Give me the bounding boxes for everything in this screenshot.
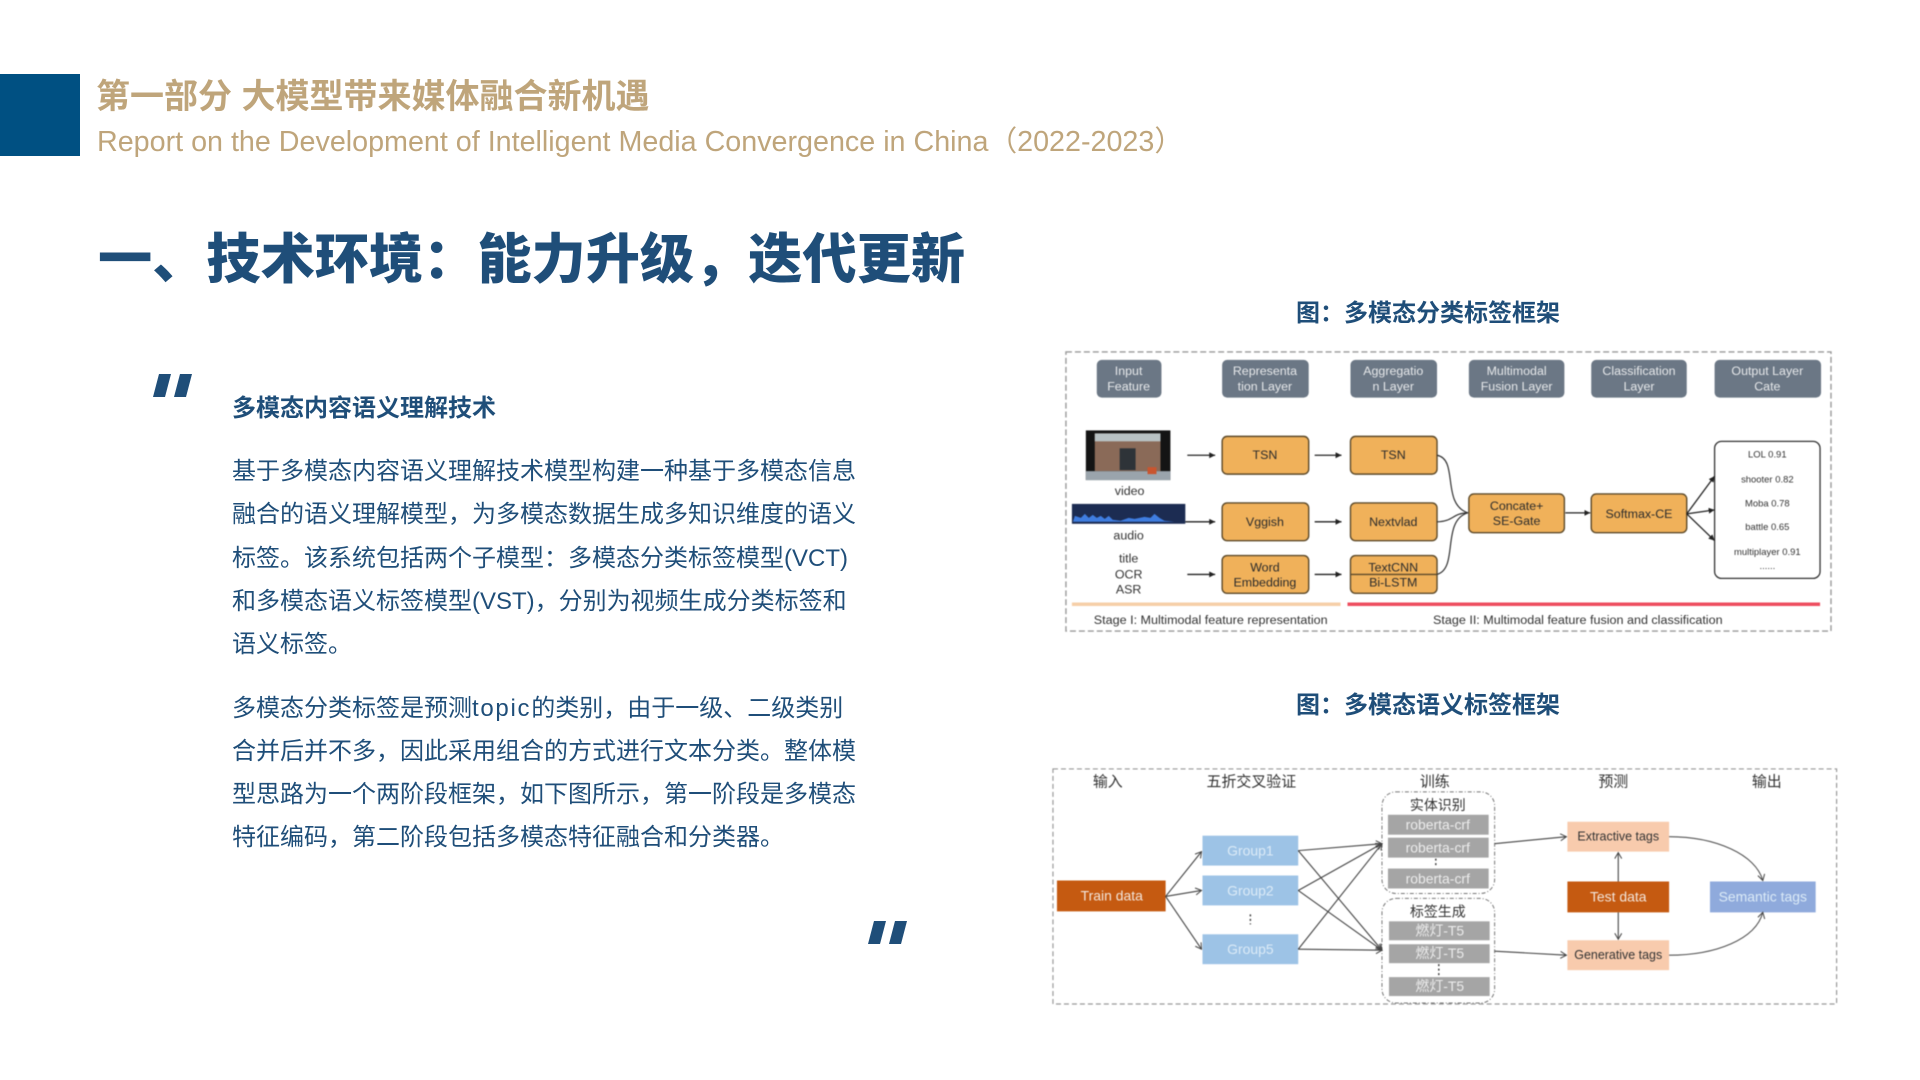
paragraph 1: 和多模态语义标签模型(VST)，分别为视频生成分类标签和: [232, 588, 847, 615]
paragraph 2: [232, 694, 856, 851]
text: TextCNN Bi-LSTM: TextCNN: [1368, 560, 1418, 574]
header: classification layer: Layer: [1623, 379, 1654, 393]
header: multimodal fusion layer: Multimodal: [1486, 363, 1546, 377]
paragraph 1: 融合的语义理解模型，为多模态数据生成多知识维度的语义: [232, 501, 856, 528]
output list: LOL 0.91: [1748, 449, 1786, 460]
header accent block: [0, 74, 80, 156]
connectors: aggregation to fusion: [1437, 455, 1468, 574]
paragraph 1: [232, 458, 856, 658]
header: aggregation layer: n Layer: [1372, 379, 1414, 393]
block: group 2: Group2: [1227, 882, 1274, 898]
label: video: video: [1115, 484, 1144, 497]
column titles: [1093, 772, 1782, 790]
panel: tag generation: 标签生成: [1410, 903, 1466, 919]
block: generative tags: Generative tags: [1574, 948, 1662, 962]
block: group 5: Group5: [1227, 941, 1274, 957]
header: output layer: Output Layer: [1731, 363, 1803, 377]
diagram: multimodal semantic label framework: [1052, 768, 1838, 1006]
output list: [1714, 441, 1820, 578]
block: test data: Test data: [1590, 888, 1647, 904]
text: word embedding: [1233, 560, 1296, 589]
arrows: train data to groups: [1166, 852, 1202, 949]
main heading: 一、技术环境：能力升级，迭代更新: [98, 230, 965, 290]
column titles: 五折交叉验证: [1207, 772, 1296, 790]
header: multimodal fusion layer: [1469, 359, 1564, 397]
output list: multiplayer 0.91: [1734, 547, 1800, 558]
report subtitle: Report on the Development of Intelligent Media Convergence in China（2022-2023）: [97, 126, 1183, 158]
paragraph 1: 基于多模态内容语义理解技术模型构建一种基于多模态信息: [232, 458, 856, 485]
arrows: groups to training: [1298, 844, 1382, 950]
frame: [1053, 769, 1837, 1004]
block: concat SE-gate: [1469, 493, 1564, 532]
header: representation layer: tion Layer: [1237, 379, 1292, 393]
paragraph 2: 特征编码，第二阶段包括多模态特征融合和分类器。: [232, 824, 784, 851]
paragraph 2: 型思路为一个两阶段框架，如下图所示，第一阶段是多模态: [232, 781, 856, 808]
text: TextCNN Bi-LSTM: Bi-LSTM: [1369, 575, 1417, 589]
header: output layer: Cate: [1754, 379, 1780, 393]
output list: ......: [1759, 560, 1775, 571]
panel: tag generation: 燃灯-T5: [1415, 922, 1464, 938]
stage arrow: stage II: [1347, 602, 1820, 605]
panel: tag generation: 燃灯-T5: [1415, 945, 1464, 961]
text: Vggish: Vggish: [1246, 514, 1284, 528]
figure heading: semantic framework: 图：多模态语义标签框架: [1296, 692, 1560, 719]
block: concat SE-gate: SE-Gate: [1493, 513, 1540, 527]
output list: battle 0.65: [1745, 522, 1789, 533]
block: softmax: [1591, 493, 1687, 532]
arrows: training to tags: [1495, 837, 1566, 955]
header: classification layer: [1591, 359, 1687, 397]
header: input feature: Feature: [1107, 379, 1150, 393]
block: group 1: Group1: [1227, 843, 1274, 859]
header: multimodal fusion layer: Fusion Layer: [1481, 379, 1552, 393]
subheading: multimodal semantic understanding: 多模态内容语义理解技术: [232, 395, 496, 422]
header: input feature: Input: [1115, 363, 1143, 377]
block: extractive tags: [1567, 822, 1669, 852]
audio waveform: [1072, 503, 1185, 523]
column titles: 输入: [1093, 773, 1123, 790]
header: output layer: [1714, 359, 1821, 397]
column titles: 训练: [1420, 773, 1450, 790]
panel: entity recognition: [1382, 792, 1495, 893]
block: semantic tags: Semantic tags: [1719, 888, 1807, 904]
diagram: multimodal classification label framework: [1064, 350, 1832, 632]
header: representation layer: Representa: [1233, 363, 1297, 377]
text: TSN aggregation: TSN: [1381, 448, 1405, 462]
header: input feature: [1097, 359, 1161, 397]
label: title OCR ASR: title: [1119, 551, 1138, 565]
header: classification layer: Classification: [1602, 363, 1675, 377]
paragraph 2: 多模态分类标签是预测topic的类别，由于一级、二级类别: [232, 694, 843, 722]
output list: Moba 0.78: [1745, 498, 1789, 509]
aggregation blocks: [1350, 436, 1437, 593]
label: title OCR ASR: ASR: [1116, 582, 1141, 596]
paragraph 1: 标签。该系统包括两个子模型：多模态分类标签模型(VCT): [232, 545, 848, 572]
column titles: 预测: [1598, 773, 1628, 790]
panel: tag generation: [1382, 898, 1495, 1003]
label: stage II: Stage II: Multimodal feature fusion and classification: [1433, 613, 1722, 627]
video thumbnail: [1086, 430, 1170, 480]
block: train data: Train data: [1081, 887, 1143, 903]
representation blocks: [1222, 436, 1308, 593]
header: aggregation layer: [1350, 359, 1437, 397]
block: group 1: [1203, 836, 1298, 866]
block: group 5: [1203, 934, 1298, 964]
label: stage I: Stage I: Multimodal feature representation: [1094, 613, 1327, 627]
block: semantic tags: [1710, 882, 1816, 912]
label: title OCR ASR: OCR: [1115, 567, 1142, 581]
text: TextCNN Bi-LSTM: [1368, 560, 1418, 589]
header: aggregation layer: Aggregatio: [1363, 363, 1423, 377]
block: concat SE-gate: Concate+: [1490, 498, 1543, 512]
arrows: test data to tags: [1617, 853, 1619, 939]
arrows: fusion to output: [1565, 476, 1714, 540]
label: audio: audio: [1113, 528, 1144, 542]
frame: [1066, 351, 1831, 631]
icon: closing quote mark: [868, 921, 907, 944]
block: test data: [1567, 882, 1669, 912]
figure heading: classification framework: 图：多模态分类标签框架: [1296, 300, 1560, 327]
text: Nextvlad: Nextvlad: [1369, 514, 1417, 528]
paragraph 2: 合并后并不多，因此采用组合的方式进行文本分类。整体模: [232, 738, 856, 765]
label: title OCR ASR: [1115, 551, 1142, 596]
block: train data: [1057, 881, 1166, 911]
paragraph 1: 语义标签。: [232, 631, 352, 658]
block: group 2: [1203, 876, 1298, 905]
stage arrow: stage I: [1072, 602, 1340, 605]
text: TSN: TSN: [1252, 448, 1277, 462]
panel: tag generation: 燃灯-T5: [1415, 978, 1464, 994]
text: word embedding: Embedding: [1233, 575, 1296, 589]
text: word embedding: Word: [1250, 560, 1280, 574]
dots: [1249, 914, 1251, 924]
panel: entity recognition: roberta-crf: [1406, 871, 1470, 887]
output list: shooter 0.82: [1741, 474, 1793, 485]
icon: opening quote mark: [153, 374, 192, 397]
arrows: input to aggregation: [1185, 455, 1341, 574]
block: softmax: Softmax-CE: [1605, 506, 1672, 520]
panel: entity recognition: roberta-crf: [1406, 840, 1470, 856]
panel: entity recognition: roberta-crf: [1406, 817, 1470, 833]
panel: entity recognition: 实体识别: [1410, 797, 1466, 813]
curves: tags to semantic tags: [1669, 837, 1763, 955]
column titles: 输出: [1752, 773, 1782, 790]
section title: 第一部分 大模型带来媒体融合新机遇: [96, 78, 649, 116]
block: generative tags: [1567, 940, 1669, 970]
block: extractive tags: Extractive tags: [1577, 830, 1659, 844]
header: representation layer: [1222, 359, 1308, 397]
